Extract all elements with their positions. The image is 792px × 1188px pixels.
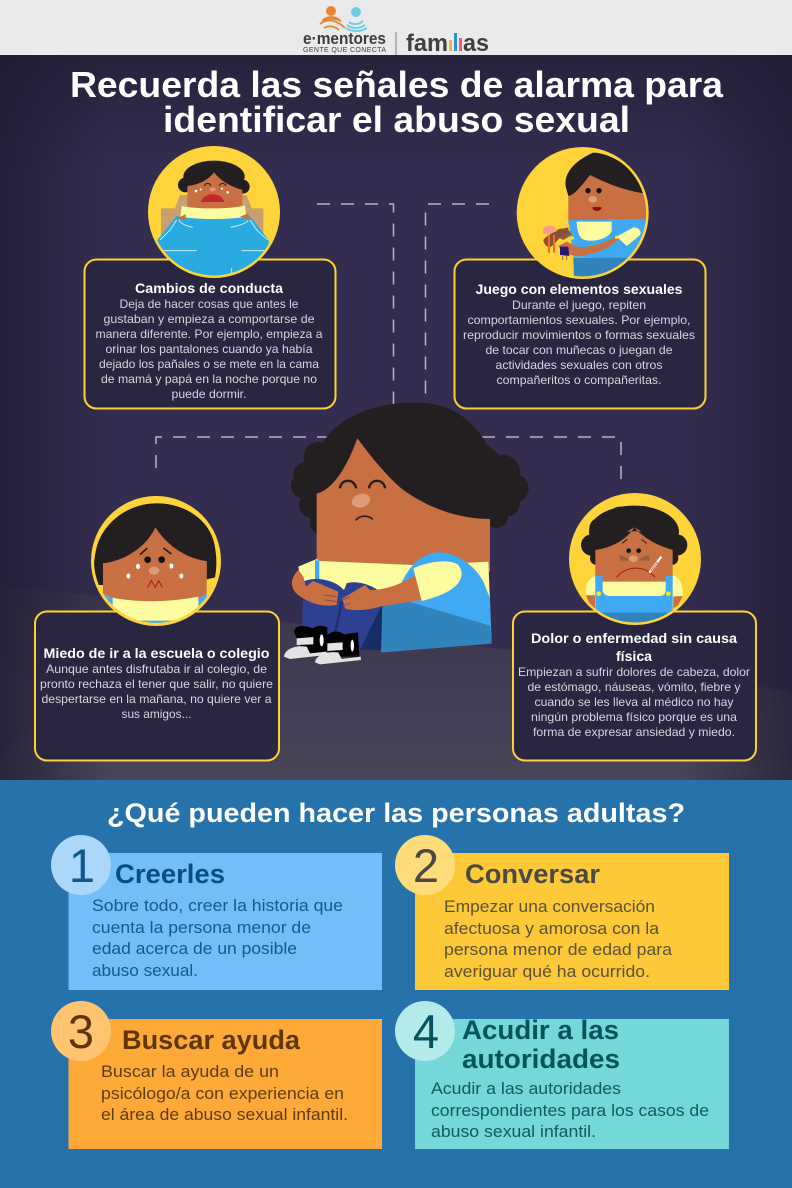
panel: 4 acudir a las autoridades [395, 1001, 729, 1149]
text block: de tocar con muñecas o juegan de [486, 343, 673, 357]
shoes [284, 626, 361, 664]
heading: Dolor o enfermedad sin causa [531, 631, 738, 646]
panel: miedo de ir a la escuela [35, 496, 279, 760]
number badge 4 [395, 1001, 455, 1061]
text block: orinar los pantalones cuando ya había [106, 342, 313, 356]
heading: Acudir a las [462, 1015, 619, 1045]
number badge 2: 2 [413, 839, 439, 892]
icon: crying child in bed [148, 146, 280, 280]
title: identificar el abuso sexual [163, 99, 630, 140]
text block: edad acerca de un posible [92, 939, 297, 958]
icon: sick child with thermometer [569, 493, 701, 627]
text block: Acudir a las autoridades [431, 1079, 621, 1098]
text block: cuenta la persona menor de [92, 918, 311, 937]
number badge 4: 4 [413, 1005, 439, 1058]
text block: cuando se les lleva al médico no hay [534, 695, 734, 709]
icon: scared child crying [91, 496, 221, 627]
text block: Durante el juego, repiten [512, 298, 646, 312]
text block: comportamientos sexuales. Por ejemplo, [468, 313, 690, 327]
header band [0, 0, 792, 55]
logo: familias: as [463, 30, 489, 57]
heading [462, 1015, 620, 1074]
dashed connectors [156, 204, 621, 480]
heading: física [616, 649, 653, 664]
text block: Sobre todo, creer la historia que [92, 896, 343, 915]
text block [96, 297, 323, 401]
heading: Buscar ayuda [122, 1025, 301, 1055]
logo: e-mentores: e·mentores [303, 29, 386, 48]
text block [518, 665, 750, 739]
text block: abuso sexual infantil. [431, 1122, 596, 1141]
dark background panel [0, 55, 792, 780]
text block [444, 897, 673, 981]
logo: e-mentores [303, 6, 386, 54]
text block: Deja de hacer cosas que antes le [120, 297, 299, 311]
number badge 3 [51, 1001, 111, 1061]
text block: Empezar una conversación [444, 897, 655, 916]
panel: juego con elementos sexuales [454, 147, 706, 408]
blue section background [0, 780, 792, 1188]
panel: 1 creerles [51, 835, 382, 990]
logo: e-mentores: GENTE QUE CONECTA [303, 47, 386, 54]
text block [92, 896, 343, 980]
panel: 2 conversar [395, 835, 729, 990]
title [70, 64, 724, 140]
text block: pronto rechaza el tener que salir, no quiere [40, 677, 273, 691]
floor [0, 586, 792, 780]
text block: dejado los pañales o se mete en la cama [99, 357, 319, 371]
text block: afectuosa y amorosa con la [444, 919, 660, 938]
text block: de estómago, náuseas, vómito, fiebre y [528, 680, 741, 694]
logos [303, 6, 489, 57]
heading: Conversar [465, 859, 600, 889]
heading: Creerles [115, 859, 225, 889]
text block: sus amigos... [122, 707, 192, 721]
card [454, 260, 706, 408]
text block [431, 1079, 709, 1141]
text block: manera diferente. Por ejemplo, empieza a [96, 327, 323, 341]
text block: persona menor de edad para [444, 940, 673, 959]
text block: abuso sexual. [92, 961, 198, 980]
text block [40, 662, 273, 721]
number badge 2 [395, 835, 455, 895]
text block: de mamá y papá en la noche porque no [101, 372, 317, 386]
heading: Juego con elementos sexuales [476, 282, 682, 297]
title: Recuerda las señales de alarma para [70, 64, 724, 105]
section heading: ¿Qué pueden hacer las personas adultas? [107, 798, 685, 828]
text block: Aunque antes disfrutaba ir al colegio, de [46, 662, 267, 676]
logo: familias: fam [406, 30, 448, 57]
text block: correspondientes para los casos de [431, 1101, 709, 1120]
text block: averiguar qué ha ocurrido. [444, 962, 650, 981]
text block: forma de expresar ansiedad y miedo. [533, 725, 735, 739]
text block: compañeritos o compañeritas. [496, 373, 662, 387]
panel: 3 buscar ayuda [51, 1001, 382, 1149]
card [35, 612, 279, 760]
text block: el área de abuso sexual infantil. [101, 1105, 348, 1124]
icon: child with dolls [517, 147, 649, 280]
heading: Cambios de conducta [135, 281, 284, 296]
text block: actividades sexuales con otros [496, 358, 663, 372]
text block: Buscar la ayuda de un [101, 1062, 279, 1081]
text block: puede dormir. [172, 387, 246, 401]
text block: despertarse en la mañana, no quiere ver a [42, 692, 272, 706]
text block: reproducir movimientos o formas sexuales [463, 328, 695, 342]
heading: Miedo de ir a la escuela o colegio [44, 646, 270, 661]
text block: psicólogo/a con experiencia en [101, 1084, 344, 1103]
text block: gustaban y empieza a comportarse de [104, 312, 315, 326]
number badge 1 [51, 835, 111, 895]
text block: ningún problema físico porque es una [531, 710, 737, 724]
text block [463, 298, 695, 387]
panel: dolor o enfermedad [513, 493, 756, 760]
heading [531, 631, 738, 664]
number badge 1: 1 [69, 839, 95, 892]
logo: familias [406, 30, 489, 57]
number badge 3: 3 [68, 1005, 94, 1058]
text block [101, 1062, 348, 1124]
heading: autoridades [462, 1044, 620, 1074]
panel: cambios de conducta [84, 146, 336, 408]
text block: Empiezan a sufrir dolores de cabeza, dolor [518, 665, 750, 679]
card [84, 260, 336, 408]
card [513, 612, 756, 760]
main character: sitting child [284, 402, 529, 664]
